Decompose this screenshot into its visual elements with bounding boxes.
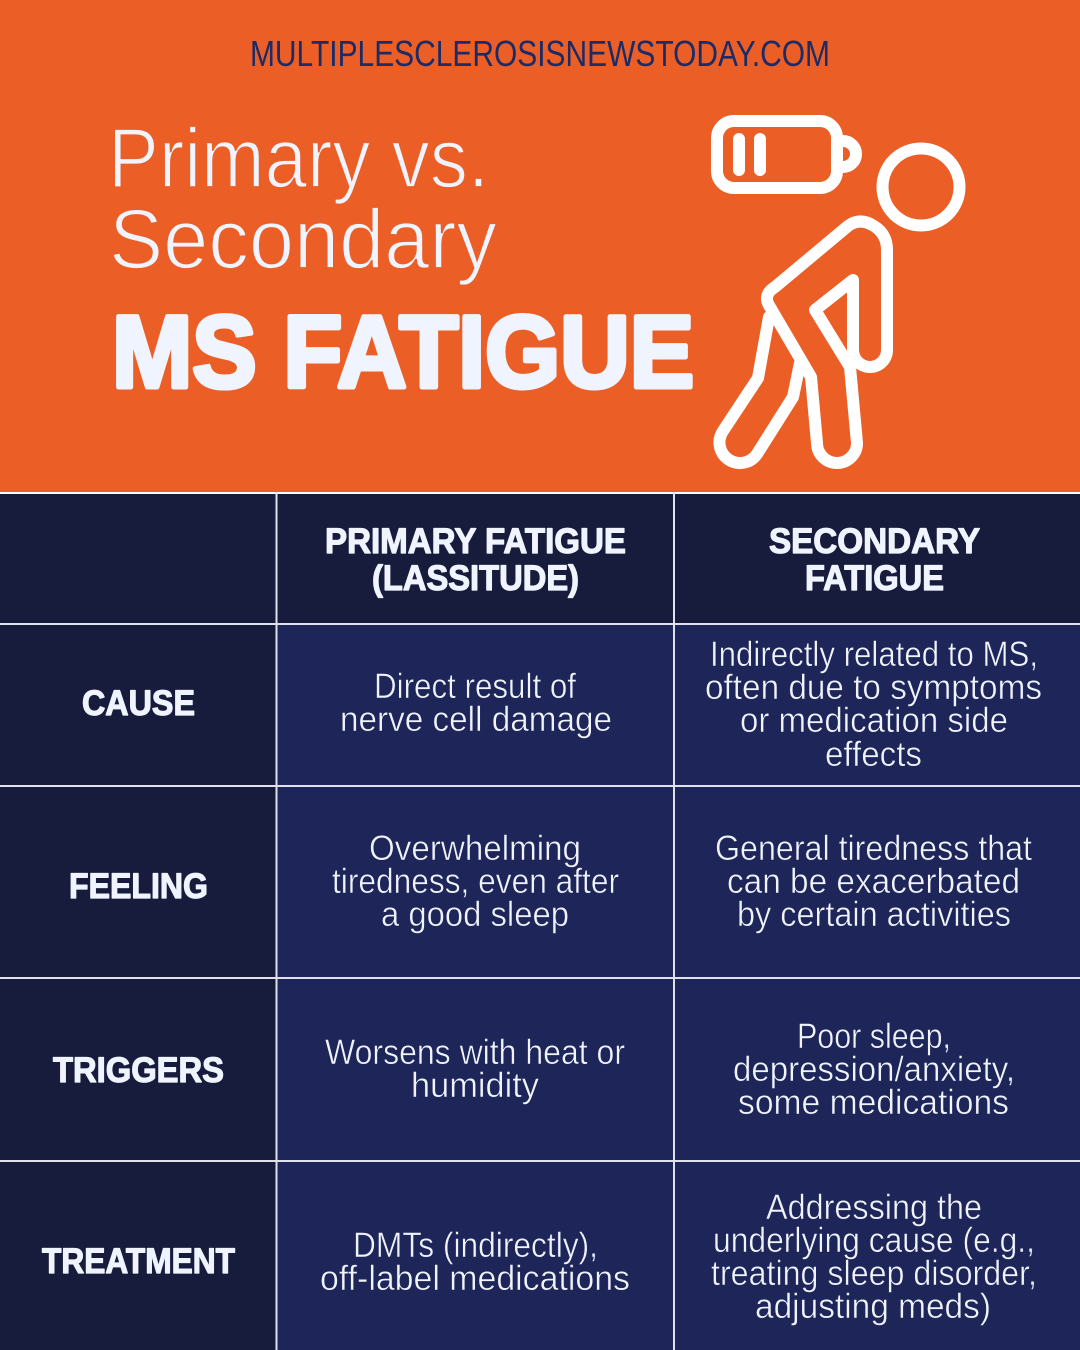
row: feeling: General tiredness that	[715, 829, 1032, 868]
header banner	[0, 0, 1080, 492]
row: feeling	[332, 829, 1032, 934]
row: feeling: can be exacerbated	[727, 862, 1020, 901]
row: triggers: depression/anxiety,	[733, 1050, 1015, 1089]
row headings: CAUSE	[82, 684, 195, 723]
row: cause: Direct result of	[374, 667, 576, 706]
row: feeling: by certain activities	[737, 895, 1011, 934]
row: triggers	[325, 1017, 1015, 1122]
column headings: PRIMARY FATIGUE	[325, 522, 626, 561]
row: feeling: a good sleep	[381, 895, 569, 934]
row: cause: or medication side	[740, 701, 1008, 740]
row: cause: often due to symptoms	[705, 668, 1042, 707]
row: cause	[340, 635, 1042, 774]
title	[108, 111, 694, 409]
row: treatment: treating sleep disorder,	[711, 1254, 1037, 1293]
row: treatment: underlying cause (e.g.,	[713, 1221, 1035, 1260]
row: feeling: Overwhelming	[369, 829, 581, 868]
row: triggers: humidity	[411, 1066, 539, 1105]
title: MS FATIGUE	[112, 295, 694, 409]
title: Primary vs.	[108, 111, 489, 205]
row headings: FEELING	[69, 867, 208, 906]
website url: MULTIPLESCLEROSISNEWSTODAY.COM	[250, 33, 830, 74]
comparison table	[0, 492, 1080, 1350]
row: treatment: off-label medications	[320, 1259, 630, 1298]
row: treatment	[320, 1188, 1037, 1326]
row: cause: Indirectly related to MS,	[710, 635, 1038, 674]
row: treatment: adjusting meds)	[755, 1287, 991, 1326]
row: treatment: Addressing the	[766, 1188, 982, 1227]
column headings: SECONDARY	[769, 522, 980, 561]
row: treatment: DMTs (indirectly),	[353, 1226, 598, 1265]
row: cause: effects	[825, 735, 922, 774]
column headings: FATIGUE	[805, 559, 944, 598]
row: feeling: tiredness, even after	[332, 862, 619, 901]
row: triggers: some medications	[738, 1083, 1009, 1122]
icon: exhausted person with low battery	[717, 121, 960, 463]
row headings: TREATMENT	[42, 1242, 235, 1281]
row: triggers: Worsens with heat or	[325, 1033, 625, 1072]
title: Secondary	[109, 192, 497, 286]
row: cause: nerve cell damage	[340, 700, 612, 739]
row headings	[42, 684, 235, 1281]
column headings: (LASSITUDE)	[372, 559, 579, 598]
row headings: TRIGGERS	[53, 1051, 224, 1090]
row: triggers: Poor sleep,	[797, 1017, 951, 1056]
column headings	[325, 522, 980, 598]
